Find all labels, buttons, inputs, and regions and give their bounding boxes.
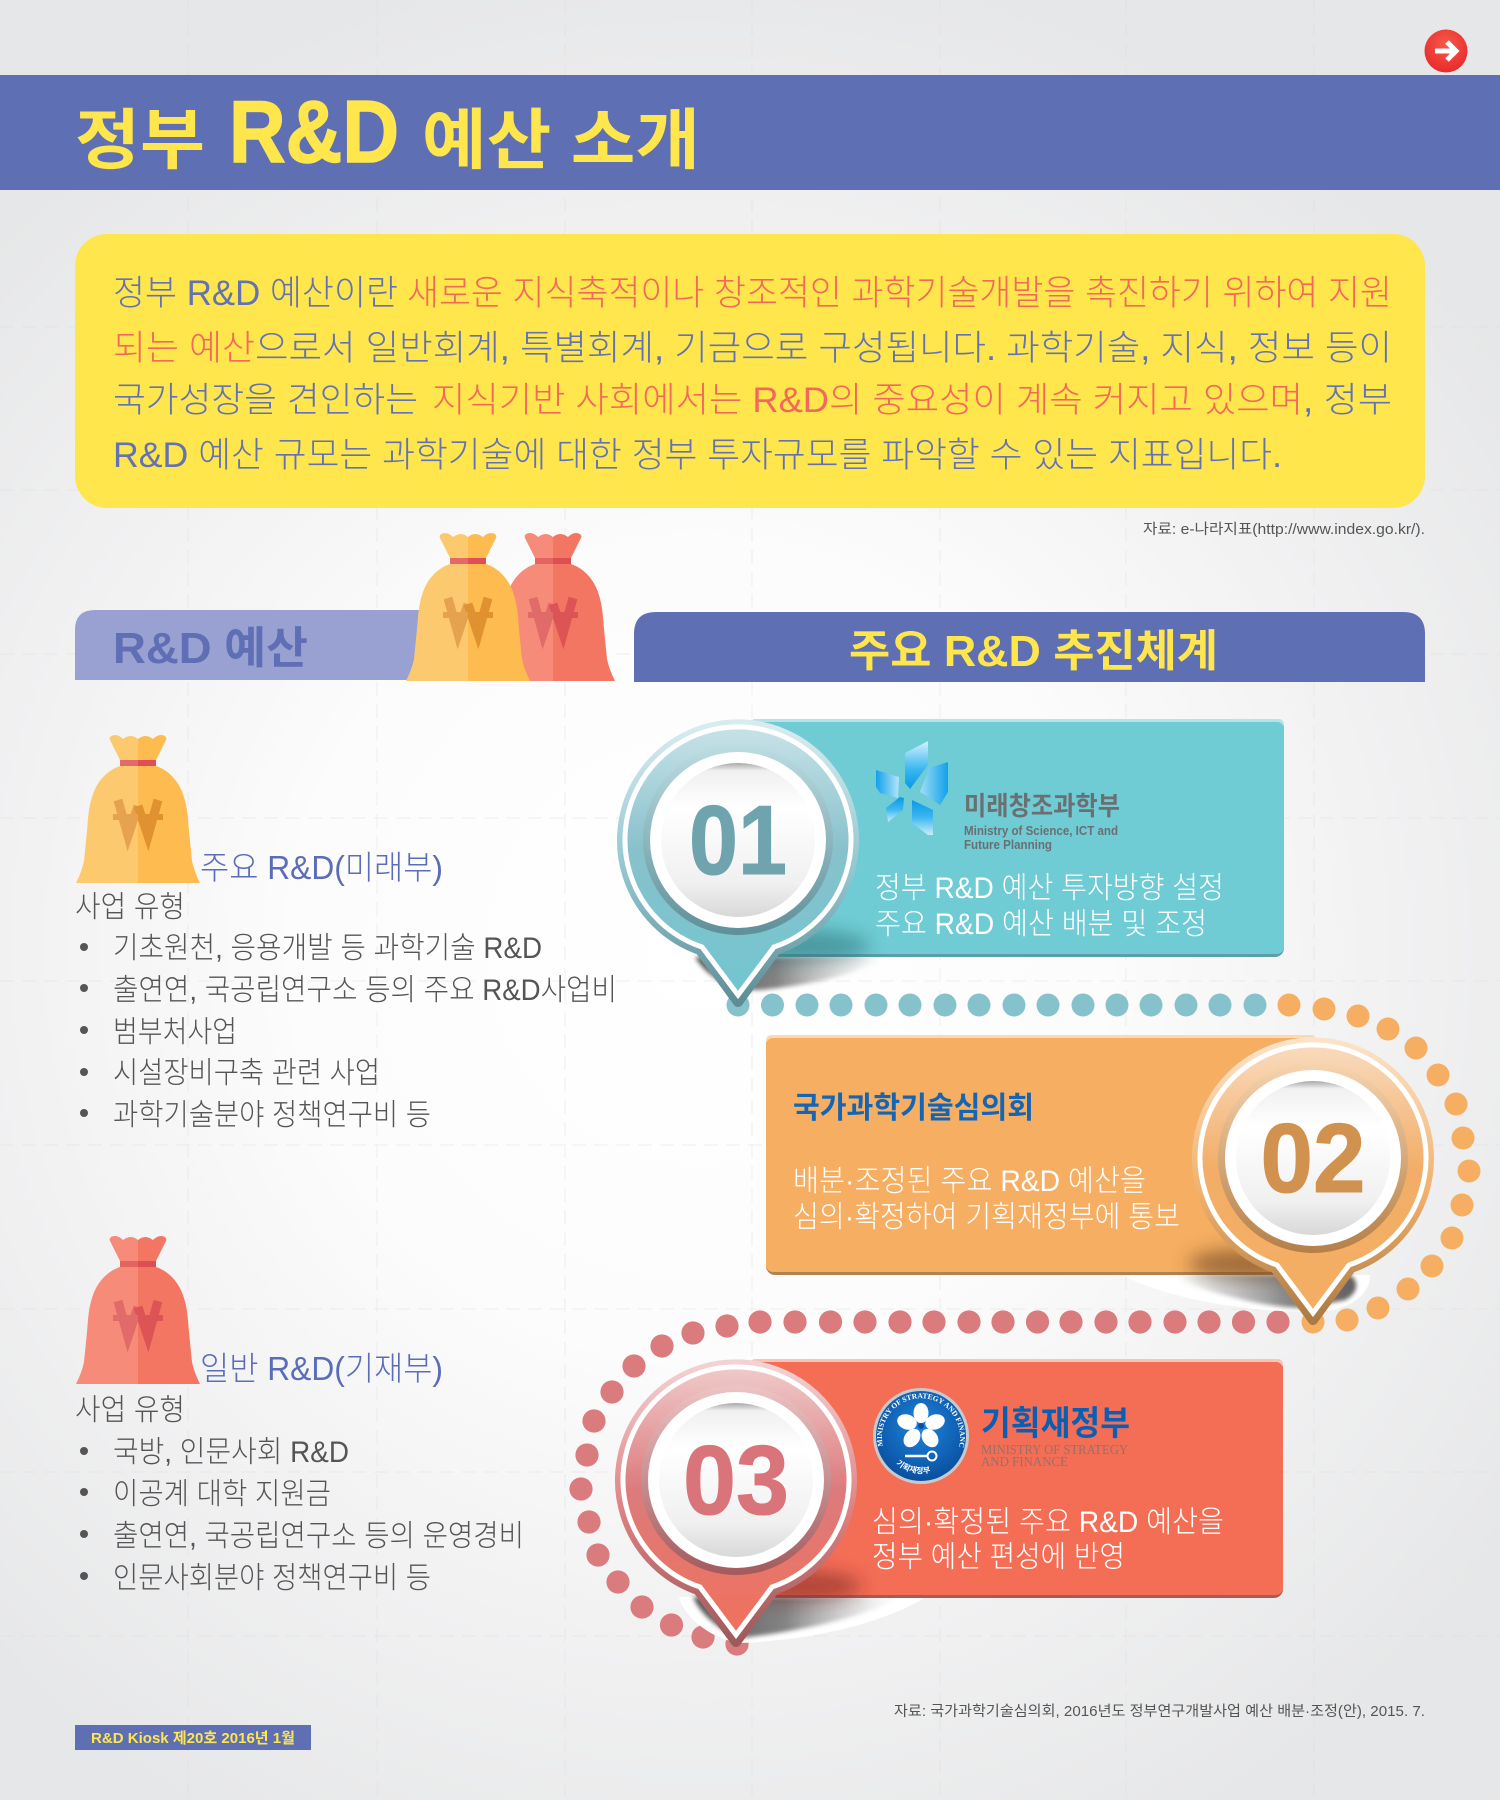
step 01 description: 주요 R&D 예산 배분 및 조정 (875, 908, 1207, 941)
panel: step 02 card (766, 1035, 1370, 1312)
logo: Ministry of Science, ICT and Future Planning (876, 741, 1120, 852)
subheading: project types: 사업 유형 (75, 891, 185, 924)
logo: Ministry of Strategy and Finance: 기획재정부 (896, 1460, 930, 1474)
definition paragraph: 새로운 지식축적이나 창조적인 과학기술개발을 촉진하기 위하여 지원 (407, 274, 1392, 313)
panel: general R&D list (75, 1236, 524, 1595)
panel: major R&D list (75, 735, 617, 1132)
step 03 description: 정부 예산 편성에 반영 (872, 1541, 1125, 1574)
definition paragraph: 국가성장을 견인하는 (113, 381, 418, 420)
definition paragraph: 으로서 일반회계, 특별회계, 기금으로 구성됩니다. 과학기술, 지식, 정보 등이 (255, 329, 1392, 368)
panel: step 03 card (614, 1359, 1283, 1643)
title banner (0, 75, 1500, 190)
icon: red money bag (491, 533, 615, 681)
marker: step 01 pin: 01 (689, 785, 787, 895)
title text: R&D (229, 82, 399, 181)
source note top: 자료: e-나라지표(http://www.index.go.kr/). (1143, 521, 1425, 538)
dotted connector: orange (1278, 994, 1480, 1334)
step 01 description: 정부 R&D 예산 투자방향 설정 (875, 872, 1224, 905)
title text: 정부 (75, 103, 205, 177)
definition paragraph: 지식기반 사회에서는 R&D의 중요성이 계속 커지고 있으며 (432, 381, 1303, 420)
step 02 description: 배분·조정된 주요 R&D 예산을 (793, 1165, 1146, 1198)
logo: Ministry of Strategy and Finance: AND FINANCE (981, 1455, 1068, 1470)
icon: red money bag (76, 1236, 200, 1384)
step 02 description (793, 1165, 1180, 1234)
panel: step 01 card (695, 719, 1284, 990)
logo: Ministry of Strategy and Finance: 기획재정부 (981, 1405, 1130, 1443)
bullet list: 기초원천, 응용개발 등 과학기술 R&D (113, 932, 542, 965)
step 02 agency name: 국가과학기술심의회 (793, 1092, 1034, 1125)
subheading: project types: 사업 유형 (75, 1394, 185, 1427)
definition paragraph: R&D 예산 규모는 과학기술에 대한 정부 투자규모를 파악할 수 있는 지표입니다. (113, 436, 1282, 475)
heading: general R&D: 일반 R&D(기재부) (200, 1350, 443, 1387)
icon: gold money bag (406, 533, 530, 681)
heading: major R&D: 주요 R&D(미래부) (200, 849, 443, 886)
marker: step 03 pin (620, 1364, 852, 1642)
icon: red next arrow button (1424, 30, 1468, 72)
bullet list (80, 1436, 524, 1595)
footer badge (75, 1725, 311, 1750)
dotted connector: pink (569, 1310, 1290, 1656)
heading tab: main R&D system: 주요 R&D 추진체계 (849, 627, 1218, 676)
logo: Ministry of Strategy and Finance: MINISTRY OF STRATEGY AND FINANCE (877, 1393, 965, 1448)
step 01 description (875, 872, 1224, 941)
definition paragraph: , 정부 (1303, 381, 1392, 420)
bullet list (80, 932, 617, 1132)
step 03 description (872, 1506, 1224, 1574)
bullet list: 과학기술분야 정책연구비 등 (113, 1099, 431, 1132)
marker: step 02 pin: 02 (1260, 1103, 1366, 1213)
logo: Ministry of Science, ICT and Future Planning: Future Planning (964, 838, 1052, 852)
heading tab: R&D budget (75, 610, 430, 680)
marker: step 01 pin (622, 724, 854, 1002)
definition paragraph (113, 274, 1392, 475)
footer badge: R&D Kiosk 제20호 2016년 1월 (91, 1730, 295, 1747)
marker: step 02 pin (1197, 1042, 1429, 1320)
bullet list: 출연연, 국공립연구소 등의 주요 R&D사업비 (113, 974, 617, 1007)
logo: Ministry of Strategy and Finance (614, 1360, 1130, 1524)
source note bottom: 자료: 국가과학기술심의회, 2016년도 정부연구개발사업 예산 배분·조정(안), 2015. 7. (894, 1703, 1425, 1720)
definition paragraph: 정부 R&D 예산이란 (113, 274, 398, 313)
title text (75, 82, 700, 181)
heading tab: main R&D system (634, 612, 1425, 682)
panel: definition callout (75, 234, 1425, 508)
bullet list: 국방, 인문사회 R&D (113, 1436, 349, 1469)
logo: Ministry of Science, ICT and Future Planning: Ministry of Science, ICT and (964, 824, 1118, 838)
dotted connector: teal (726, 994, 1266, 1016)
logo: Ministry of Strategy and Finance: MINISTRY OF STRATEGY (981, 1443, 1128, 1458)
bullet list: 이공계 대학 지원금 (113, 1478, 331, 1511)
bullet list: 시설장비구축 관련 사업 (113, 1057, 380, 1090)
step 02 description: 심의·확정하여 기획재정부에 통보 (793, 1201, 1180, 1234)
logo: Ministry of Science, ICT and Future Planning: 미래창조과학부 (964, 791, 1120, 821)
bullet list: 출연연, 국공립연구소 등의 운영경비 (113, 1520, 524, 1553)
marker: step 03 pin: 03 (683, 1425, 789, 1535)
bullet list: 인문사회분야 정책연구비 등 (113, 1562, 431, 1595)
title text: 예산 소개 (422, 103, 700, 177)
bullet list: 범부처사업 (113, 1016, 237, 1049)
definition paragraph: 되는 예산 (113, 329, 255, 368)
icon: gold money bag (76, 735, 200, 883)
heading tab: R&D budget: R&D 예산 (113, 624, 308, 673)
step 03 description: 심의·확정된 주요 R&D 예산을 (872, 1506, 1224, 1539)
